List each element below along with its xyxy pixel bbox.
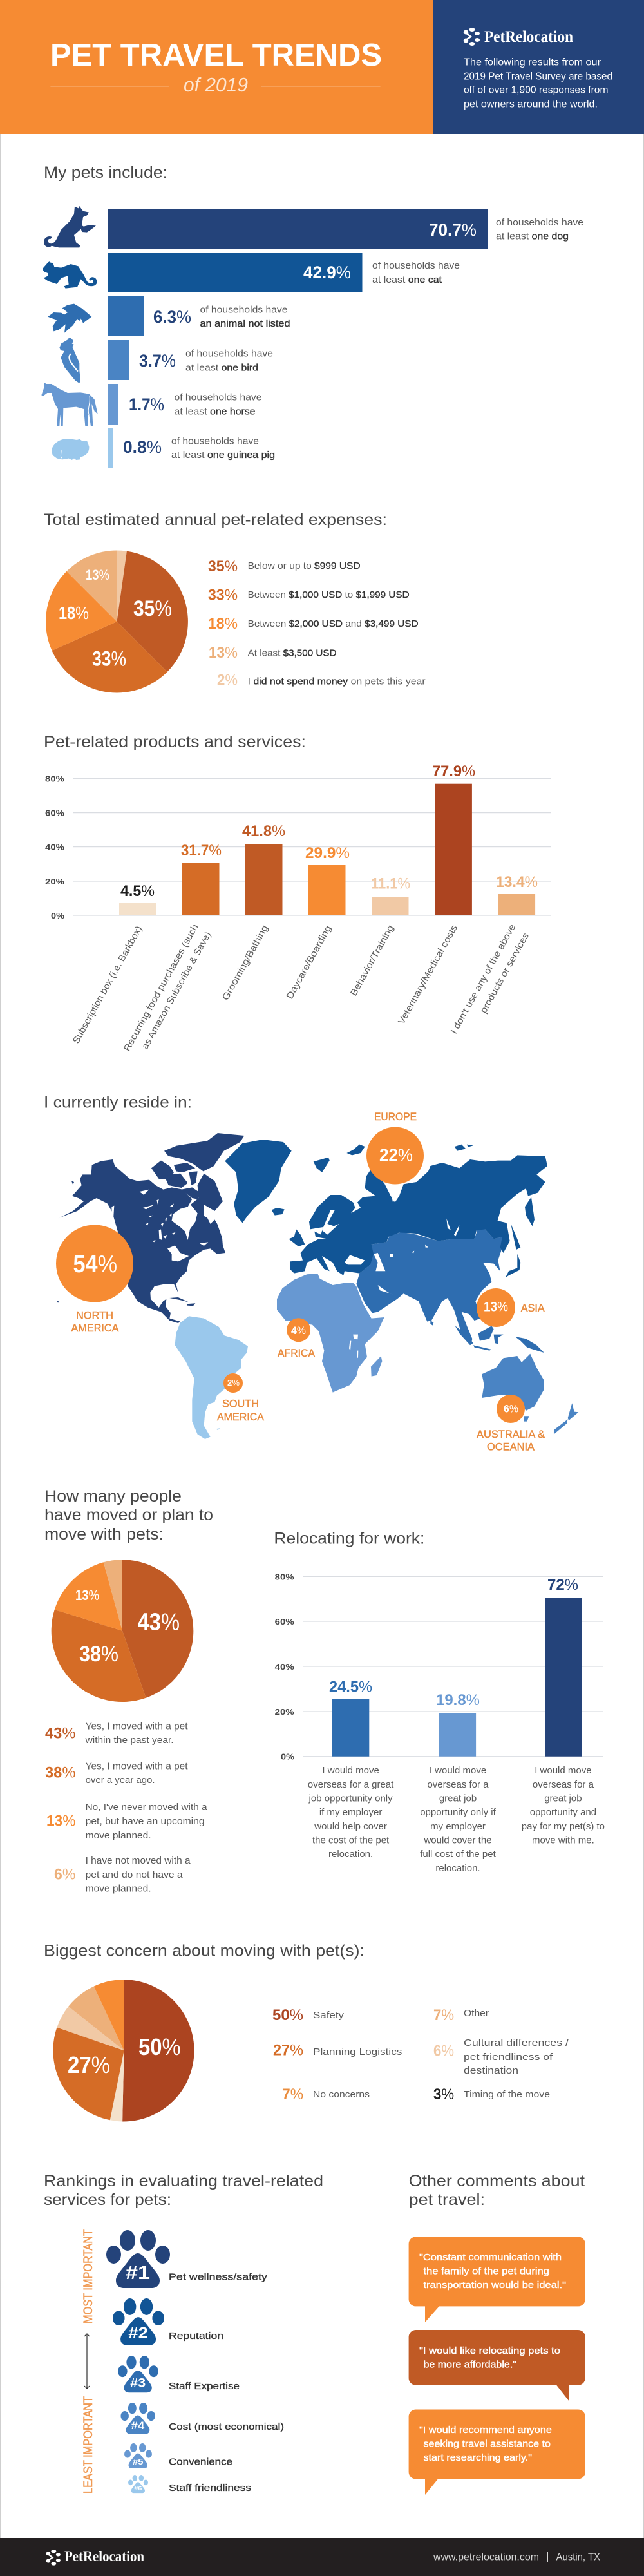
legend: biggest concern: 27% [273,2042,303,2059]
panel: my pets include [41,164,583,468]
bar: cat 42.9%: 42.9% [303,263,351,282]
pie chart: expenses: 33% [92,647,126,670]
legend: expenses: Between $2,000 USD and $3,499 USD [248,618,419,629]
bar: cat 42.9%: of households have [372,260,460,271]
footer contact: Austin, TX [556,2552,600,2563]
heading [409,2172,585,2209]
bar chart: relocating for work [275,1572,605,1874]
legend: expenses: 18% [208,615,238,633]
heading: My pets include: [44,164,167,182]
speech bubble 3: start researching early." [424,2453,532,2463]
ranking labels [169,2272,284,2494]
icon: paw #2 [113,2298,164,2345]
bar chart: relocating for work: 72% [547,1576,578,1594]
caption: bar 1: relocation. [328,1849,373,1860]
icon: paw #6: #6 [134,2485,142,2492]
map: South America [175,1316,248,1439]
legend: biggest concern: 6% [433,2043,454,2060]
panel: I currently reside in [44,1094,578,1453]
bar: dog 70.7% [108,209,583,249]
footer contact: www.petrelocation.com [433,2552,539,2563]
speech bubble 3: seeking travel assistance to [424,2439,551,2450]
callout: South America 2%: AMERICA [217,1411,265,1423]
pie chart: moved with pets: 43% [138,1609,180,1636]
caption: bar 3 [522,1765,605,1846]
map: Asia [356,1229,544,1353]
callout: North America 54% [56,1225,133,1334]
legend: moved with pets: No, I've never moved with a [86,1802,207,1813]
callout: Europe 22%: 22% [379,1145,413,1165]
legend: moved with pets: 13% [46,1813,75,1830]
speech bubble 1: "Constant communication with [419,2253,562,2263]
pie chart: expenses: 18% [59,603,89,623]
icon: paw #1: #1 [126,2262,150,2284]
legend: biggest concern: Timing of the move [464,2089,550,2100]
legend: expenses [208,558,426,689]
bar: other animal 6.3%: an animal not listed [200,318,290,329]
legend: moved with pets: Yes, I moved with a pet [86,1761,188,1772]
bar chart: products and services: products or services [478,931,531,1015]
legend: expenses: 2% [217,672,238,689]
caption: bar 2: I would move [430,1765,486,1776]
heading [44,1487,213,1543]
bar: other animal 6.3% [108,296,290,336]
bar: guinea pig 0.8% [108,428,275,468]
caption: bar 2: full cost of the pet [420,1849,497,1860]
caption: bar 3: overseas for a [533,1779,594,1790]
bar chart: products and services: 29.9% [305,844,350,862]
pie chart: biggest concern [53,1980,194,2122]
icon: dog [44,206,96,247]
intro text [464,57,612,110]
bar: dog 70.7%: at least one dog [496,231,569,242]
legend: moved with pets: 6% [54,1866,75,1884]
icon: fish [48,304,91,333]
callout: North America 54%: AMERICA [71,1322,119,1334]
ranking labels: Staff friendliness [169,2483,251,2494]
pie chart: moved with pets [52,1560,193,1702]
caption: bar 2: great job [439,1793,477,1804]
heading: How many people [44,1487,182,1505]
bar chart: products and services: Daycare/Boarding [285,924,334,1001]
legend: moved with pets: move planned. [86,1830,151,1841]
caption: bar 1 [308,1765,394,1860]
pie chart: expenses: 13% [86,567,109,583]
pie chart: moved with pets: 13% [75,1587,99,1603]
subtitle: of 2019 [184,73,248,96]
bar: guinea pig 0.8%: of households have [171,435,259,446]
bar chart: relocating for work: 19.8% [436,1692,480,1709]
callout: Europe 22% [366,1111,424,1184]
caption: bar 1: the cost of the pet [312,1835,390,1846]
map: Africa [277,1274,384,1393]
legend: biggest concern: 3% [433,2086,454,2103]
bar chart: products and services: 80% [45,774,64,783]
callout: South America 2%: SOUTH [222,1398,259,1410]
legend: expenses: At least $3,500 USD [248,648,337,659]
caption: bar 1: overseas for a great [308,1779,394,1790]
caption: bar 3: I would move [535,1765,592,1776]
intro text: The following results from our [464,57,601,68]
legend: expenses: Between $1,000 USD to $1,999 USD [248,589,410,600]
bar chart: products and services: 60% [45,808,64,818]
speech bubble 2: be more affordable." [424,2360,516,2370]
callout: Asia 13% [477,1288,545,1327]
icon: paw #1 [106,2230,170,2288]
ranking labels: Cost (most economical) [169,2421,284,2432]
bar chart: products and services: 20% [45,877,64,886]
speech bubble 2 [409,2330,585,2401]
bar: horse 1.7%: of households have [174,392,261,403]
bar chart: products and services: 31.7% [181,842,222,859]
legend: biggest concern [272,2007,569,2103]
legend: moved with pets: 43% [45,1725,75,1742]
legend: moved with pets: within the past year. [85,1735,174,1746]
speech bubble 2: "I would like relocating pets to [419,2346,560,2356]
legend: biggest concern: Safety [313,2010,345,2021]
bar chart: products and services [45,763,551,1053]
icon: cat [43,261,97,289]
bar chart: relocating for work: 40% [275,1662,294,1672]
legend: biggest concern: 7% [282,2086,303,2103]
pie chart: biggest concern: 27% [68,2052,110,2078]
callout: South America 2% [217,1373,265,1423]
bar: cat 42.9% [108,253,460,292]
legend: moved with pets [45,1721,207,1894]
pie chart: biggest concern: 50% [138,2034,181,2060]
callout: Africa 4%: 4% [291,1324,306,1337]
bar: other animal 6.3%: of households have [200,304,287,316]
icon: paw #2: #2 [128,2324,148,2342]
icon: paw #3 [118,2356,158,2392]
caption: bar 2 [420,1765,497,1874]
speech bubble 3: "I would recommend anyone [419,2425,552,2436]
callout: Africa 4%: AFRICA [278,1347,316,1359]
callout: North America 54%: NORTH [76,1309,113,1322]
callout: Europe 22%: EUROPE [374,1111,417,1123]
caption: bar 3: opportunity and [530,1807,596,1818]
heading: I currently reside in: [44,1094,192,1112]
logo: PetRelocation: PetRelocation [484,28,573,46]
heading [44,2172,323,2209]
bar chart: products and services: 11.1% [371,875,410,893]
legend: biggest concern: pet friendliness of [464,2052,553,2063]
bar chart: relocating for work: 24.5% [329,1679,372,1695]
panel: biggest concern [44,1942,569,2122]
legend: expenses: 33% [208,586,238,604]
legend: expenses: Below or up to $999 USD [248,560,361,571]
intro text: pet owners around the world. [464,99,598,110]
icon: paw #4 [121,2403,155,2434]
panel: annual expenses [44,511,426,692]
bar chart: products and services: Behavior/Training [349,924,396,998]
legend: biggest concern: destination [464,2065,518,2076]
icon: guinea pig [52,439,89,460]
world map [56,1111,578,1453]
heading: have moved or plan to [44,1506,213,1524]
bar chart: relocating for work: 80% [275,1572,294,1581]
arrow: importance scale [84,2334,90,2389]
bar chart: products and services: I don't use any of the above [449,922,518,1036]
bar chart: products and services: Recurring food purchases (such [122,922,201,1053]
caption: bar 3: great job [544,1793,582,1804]
title: PET TRAVEL TRENDS [50,38,382,73]
heading: services for pets: [44,2191,171,2209]
speech bubble 1: transportation would be ideal." [424,2280,566,2291]
bar chart: products and services: as Amazon Subscribe & Save) [140,930,213,1051]
legend: moved with pets: I have not moved with a [86,1855,191,1866]
icon: paw #5 [124,2443,152,2468]
icon: paw #3: #3 [130,2376,146,2390]
ranking labels: Staff Expertise [169,2381,240,2392]
caption: bar 3: move with me. [532,1835,594,1846]
legend: biggest concern: Cultural differences / [464,2037,569,2048]
callout: Australia and Oceania 6% [477,1395,545,1453]
bar: horse 1.7%: 1.7% [129,395,164,414]
bar chart: products and services: 41.8% [242,823,285,840]
ranking labels: Reputation [169,2331,223,2342]
bar: bird 3.7%: 3.7% [139,351,176,370]
icon: paw #4: #4 [131,2420,144,2432]
bar chart: products and services: Veterinary/Medical costs [397,923,460,1026]
intro text: 2019 Pet Travel Survey are based [464,71,612,82]
callout: Australia and Oceania 6%: OCEANIA [487,1441,535,1453]
heading: Total estimated annual pet-related expenses: [44,511,387,529]
bar chart: products and services: 77.9% [432,763,475,780]
bar chart: relocating for work: 20% [275,1707,294,1717]
callout: Africa 4% [278,1318,316,1359]
axis label: least important: LEAST IMPORTANT [82,2396,95,2494]
bar: horse 1.7%: at least one horse [174,406,255,417]
pie chart: moved with pets: 38% [79,1642,118,1666]
panel: relocating for work [274,1530,605,1874]
legend: moved with pets: move planned. [86,1884,151,1894]
bar chart: products and services: Grooming/Bathing [221,924,270,1002]
legend: biggest concern: Other [464,2008,489,2019]
icon: bird [59,338,80,383]
panel: products and services [44,733,551,1053]
heading: Biggest concern about moving with pet(s): [44,1942,365,1960]
bar chart: products and services: 0% [51,911,64,921]
bar: bird 3.7% [108,340,273,380]
callout: South America 2%: 2% [227,1378,240,1388]
legend: biggest concern: No concerns [313,2089,370,2100]
heading: pet travel: [409,2191,485,2209]
bar chart: products and services: 40% [45,843,64,852]
bar: horse 1.7% [108,384,261,425]
legend: expenses: 13% [209,644,238,662]
callout: Australia and Oceania 6%: AUSTRALIA & [477,1428,545,1440]
icon: horse [41,383,98,426]
heading: Other comments about [409,2172,585,2190]
map: Greenland and Iceland [225,1140,292,1223]
pie chart: expenses: 35% [133,596,172,621]
legend: expenses: I did not spend money on pets this year [248,676,426,687]
panel: moved or plan to move [44,1487,213,1894]
legend: moved with pets: 38% [45,1764,75,1782]
callout: Asia 13%: ASIA [521,1302,545,1314]
speech bubble 3 [409,2409,585,2495]
map: Europe and Russia [289,1145,547,1277]
bar: other animal 6.3%: 6.3% [153,307,191,327]
heading: move with pets: [44,1525,164,1543]
bar: cat 42.9%: at least one cat [372,274,442,285]
heading: Relocating for work: [274,1530,424,1548]
caption: bar 2: would cover the [423,1835,492,1846]
bar: bird 3.7%: of households have [185,348,273,359]
map: North America [57,1133,244,1323]
legend: biggest concern: 7% [433,2007,454,2024]
footer logo: PetRelocation [64,2548,144,2564]
caption: bar 1: I would move [322,1765,379,1776]
legend: moved with pets: over a year ago. [86,1775,155,1786]
intro text: off of over 1,900 responses from [464,85,608,96]
callout: North America 54%: 54% [73,1251,117,1278]
bar: guinea pig 0.8%: at least one guinea pig [171,450,275,461]
caption: bar 2: my employer [430,1821,486,1832]
heading: Pet-related products and services: [44,733,306,751]
legend: moved with pets: pet, but have an upcoming [86,1816,205,1827]
footer contact [433,2552,600,2563]
legend: biggest concern: 50% [272,2007,303,2024]
caption: bar 1: would help cover [314,1821,387,1832]
bar chart: relocating for work: 60% [275,1617,294,1627]
footer [0,2538,644,2576]
panel: other comments [409,2172,585,2495]
caption: bar 1: if my employer [319,1807,382,1818]
callout: Asia 13%: 13% [484,1300,508,1314]
bar chart: products and services: Subscription box (i.e. Barkbox) [71,924,144,1045]
caption: bar 2: relocation. [435,1863,480,1874]
ranking labels: Convenience [169,2457,232,2468]
legend: moved with pets: pet and do not have a [86,1869,183,1880]
icon: paw #6 [128,2475,148,2493]
legend: biggest concern: Planning Logistics [313,2046,402,2057]
panel: rankings [44,2172,323,2494]
map: Australia and Oceania [482,1354,578,1435]
icon: paw #5: #5 [133,2457,144,2466]
bar: guinea pig 0.8%: 0.8% [123,437,162,457]
legend: moved with pets: Yes, I moved with a pet [86,1721,188,1732]
callout: Australia and Oceania 6%: 6% [504,1403,518,1415]
axis label: most important: MOST IMPORTANT [82,2229,95,2323]
speech bubble 1 [409,2237,585,2322]
bar: bird 3.7%: at least one bird [185,362,258,374]
caption: bar 3: pay for my pet(s) to [522,1821,605,1832]
header banner [0,0,644,134]
caption: bar 1: job opportunity only [308,1793,393,1804]
heading: Rankings in evaluating travel-related [44,2172,323,2190]
ranking labels: Pet wellness/safety [169,2272,268,2283]
pie chart: expenses [46,550,188,692]
speech bubble 1: the family of the pet during [424,2266,549,2276]
bar: dog 70.7%: of households have [496,217,583,228]
bar: dog 70.7%: 70.7% [429,220,477,240]
bar chart: products and services: 13.4% [496,873,538,891]
caption: bar 2: opportunity only if [420,1807,497,1818]
bar chart: relocating for work: 0% [281,1752,294,1762]
legend: expenses: 35% [208,558,238,575]
caption: bar 2: overseas for a [427,1779,489,1790]
bar chart: products and services: 4.5% [120,883,155,900]
